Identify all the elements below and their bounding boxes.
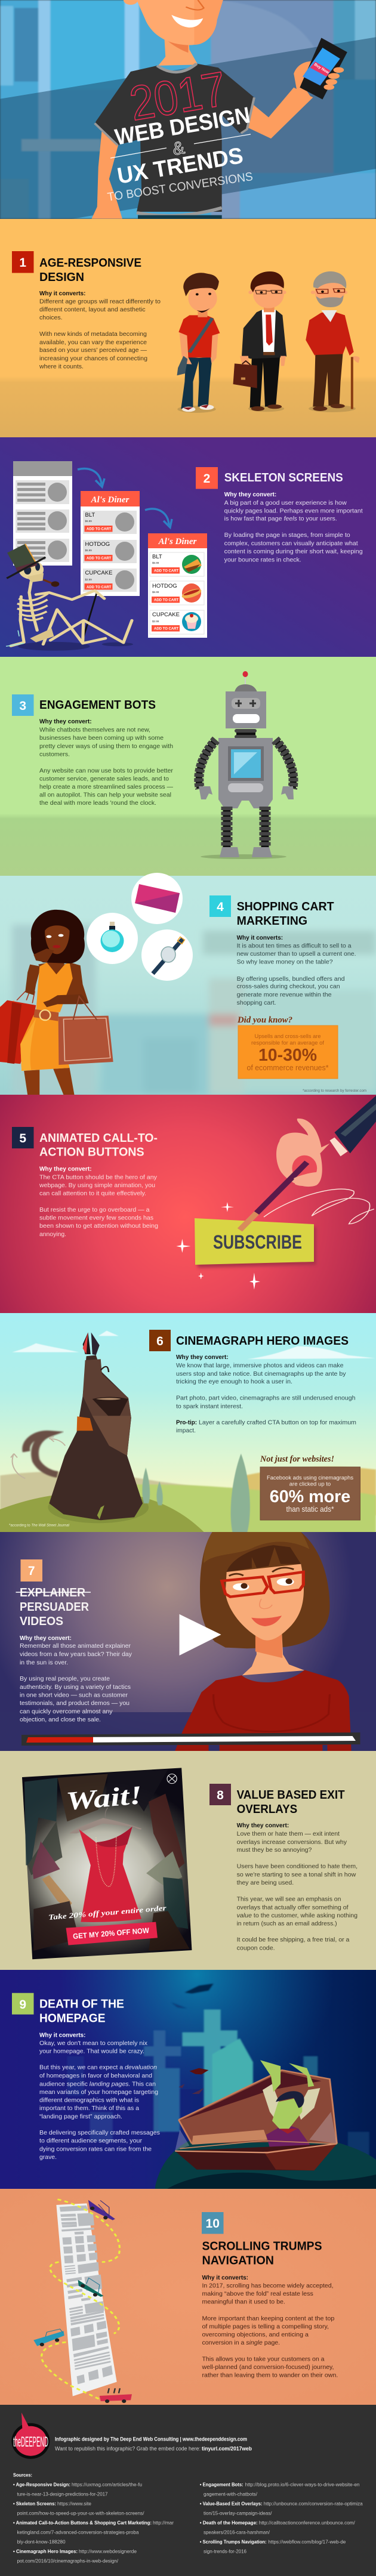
number badge 9 xyxy=(12,1993,33,2015)
body text: Why they convert: xyxy=(20,1635,72,1642)
sources: right column: gagement-with-chatbots/ xyxy=(204,2491,258,2497)
sources: right column: tion/15-overlay-campaign-ideas/ xyxy=(204,2510,272,2516)
panel: 6 cinemagraph hero images xyxy=(0,1313,376,1533)
body text: videos from a few years back? Their day xyxy=(20,1651,132,1658)
sources: right column: speakers/2016-cara-harshman/ xyxy=(204,2529,270,2535)
body text: to spark instant interest. xyxy=(176,1404,243,1410)
panel: 4 shopping cart marketing xyxy=(0,873,376,1095)
wireframe card 3: fully loaded: Al's Diner xyxy=(158,537,197,546)
heading xyxy=(39,1998,124,2025)
body text: shopping cart. xyxy=(237,1000,276,1006)
body text: meaningful than it used to be. xyxy=(202,2299,285,2306)
footnote: *according to research by forrester.com xyxy=(303,1089,366,1093)
heading: DEATH OF THE xyxy=(39,1998,124,2011)
body text: Users have been conditioned to hate them, xyxy=(237,1864,357,1870)
body text: well-planned (and conversion-focused) journey, xyxy=(201,2364,334,2371)
body text: Why they convert: xyxy=(39,719,92,725)
credit lines: Want to republish this infographic? Grab the embed code here: xyxy=(55,2445,201,2451)
body text: overcoming objections, and enticing a xyxy=(202,2331,309,2338)
body text: overlays increase conversions. But why xyxy=(237,1839,347,1846)
title xyxy=(107,62,254,204)
callout: not just for websites: 60% more xyxy=(270,1487,350,1506)
body text: By offering upsells, bundled offers and xyxy=(237,976,345,983)
wireframe card 3: fully loaded: ADD TO CART xyxy=(154,599,179,603)
body text: dying conversion rates can rise from the xyxy=(39,2146,152,2152)
wireframe card 2: partly loaded: Al's Diner xyxy=(91,495,130,505)
body text xyxy=(20,1635,132,1723)
wireframe card 3: fully loaded: ADD TO CART xyxy=(154,569,179,573)
callout: not just for websites: Not just for websites! xyxy=(260,1454,334,1464)
wireframe card 3: fully loaded xyxy=(148,533,207,638)
wireframe card 2: partly loaded xyxy=(81,491,140,596)
heading: NAVIGATION xyxy=(202,2254,274,2268)
body text: “landing page first” approach. xyxy=(39,2114,122,2120)
heading: MARKETING xyxy=(237,915,307,928)
body text: annoying. xyxy=(39,1231,66,1238)
body text: all on autopilot. This can help your website seal xyxy=(39,792,171,799)
wireframe card 3: fully loaded: $2.99 xyxy=(152,620,159,623)
heading: DESIGN xyxy=(39,271,84,284)
blurred background figure at desk xyxy=(290,745,366,826)
body text: testimonials, and product demos — you xyxy=(20,1700,130,1707)
body text: in return (such as an email address.) xyxy=(237,1920,337,1927)
body text: Be delivering specifically crafted messages xyxy=(39,2130,160,2136)
title: UX TRENDS xyxy=(115,143,245,189)
body text: mean variants of your homepage targeting xyxy=(39,2089,158,2096)
callout: not just for websites: than static ads* xyxy=(286,1505,334,1514)
body text: subtle movement every few seconds has xyxy=(39,1215,153,1222)
body text: customers. xyxy=(39,752,70,758)
number badge 10: 10 xyxy=(206,2217,220,2231)
icon: video play button xyxy=(179,1614,221,1655)
number badge 4 xyxy=(209,895,231,917)
section 3 background xyxy=(0,657,376,876)
number badge 6 xyxy=(149,1330,171,1351)
wireframe card 1: skeleton xyxy=(13,461,72,566)
body text: your homepage. That would be crazy. xyxy=(39,2048,144,2055)
body text: generate more revenue within the xyxy=(237,992,332,998)
sources: left column: point.com/how-to-speed-up-your-ux-with-skeleton-screens/ xyxy=(17,2510,144,2516)
body text: A big part of a good user experience is how xyxy=(224,500,347,506)
number badge 10 xyxy=(202,2212,223,2234)
title: WEB DESIGN xyxy=(113,103,252,150)
number badge 3: 3 xyxy=(19,699,26,713)
sources: left column: • Age-Responsive Design: xyxy=(13,2482,70,2487)
callout: not just for websites: Facebook ads using cinemagraphs xyxy=(267,1475,353,1481)
panel: 10 scrolling trumps navigation xyxy=(0,2189,376,2405)
wireframe card 2: partly loaded: ADD TO CART xyxy=(87,527,112,531)
wireframe card 3: fully loaded: $6.99 xyxy=(152,591,159,594)
wireframe card 3: fully loaded: HOTDOG xyxy=(152,583,177,589)
body text: By using real people, you create xyxy=(20,1676,110,1682)
heading: SCROLLING TRUMPS xyxy=(202,2240,322,2253)
heading: SKELETON SCREENS xyxy=(224,471,343,484)
wireframe card 2: partly loaded: ADD TO CART xyxy=(87,557,112,561)
body text: users stop and take notice. But cinemagraphs up the ante by xyxy=(176,1371,346,1377)
number badge 7 xyxy=(20,1559,42,1582)
section 5 background xyxy=(0,1095,376,1313)
body text: tricking the eye enough to hook a user in. xyxy=(176,1379,292,1385)
body text: coupon code. xyxy=(237,1945,275,1951)
number badge 1 xyxy=(12,251,33,273)
panel: 2 skeleton screens xyxy=(0,437,376,657)
body text: to different audience segments, your xyxy=(39,2138,143,2145)
callout: not just for websites: are clicked up to xyxy=(289,1481,331,1488)
character: robot xyxy=(199,671,294,859)
exit overlay popup illustration xyxy=(22,1768,192,1959)
character: woman with shopping bags xyxy=(0,910,113,1095)
body text: choices. xyxy=(39,315,63,322)
panel: 8 value based exit overlays xyxy=(0,1751,376,1970)
heading: VALUE BASED EXIT xyxy=(237,1789,345,1802)
subscribe button: SUBSCRIBE xyxy=(213,1231,302,1253)
body text xyxy=(237,1823,357,1951)
sources: left column: http://mar xyxy=(153,2520,174,2525)
heading: AGE-RESPONSIVE xyxy=(39,257,141,270)
footer background xyxy=(0,2405,376,2576)
credit lines: Infographic designed by The Deep End Web Consulting | www.thedeependdesign.com xyxy=(55,2436,247,2442)
body text: Love them or hate them — exit intent xyxy=(237,1831,340,1837)
panel: 5 animated call-to-action buttons xyxy=(0,1095,376,1313)
video progress bar xyxy=(21,1732,360,1746)
body text: impact. xyxy=(176,1428,196,1434)
body text: conversion in a single page. xyxy=(202,2340,280,2346)
sources: left column: ketingland.com/7-advanced-conversion-strategies-proba xyxy=(17,2529,139,2535)
number badge 9: 9 xyxy=(19,1998,26,2012)
heading with strikethrough: PERSUADER xyxy=(20,1601,90,1614)
body text: been shown to get attention without being xyxy=(39,1223,158,1230)
sources: right column: • Engagement Bots: xyxy=(200,2482,244,2487)
heading with strikethrough: EXPLAINER xyxy=(20,1586,86,1599)
sources: left column: http://www.webdesignerde xyxy=(79,2549,137,2554)
heading xyxy=(202,2240,322,2268)
sources: left column: • Animated Call-to-Action Buttons & Shopping Cart Marketing: xyxy=(13,2520,152,2525)
sources: right column: • Death of the Homepage: xyxy=(200,2520,258,2525)
logo: the deep end xyxy=(11,2413,50,2459)
heading xyxy=(39,1132,158,1159)
number badge 3 xyxy=(12,694,33,716)
body text xyxy=(224,492,363,563)
sources: left column: ture-is-near-13-design-predictions-for-2017 xyxy=(17,2491,108,2497)
character: man with phone xyxy=(91,0,347,219)
wireframe card 3: fully loaded: CUPCAKE xyxy=(152,611,180,618)
sources: left column: https://uxmag.com/articles/the-fu xyxy=(72,2482,142,2487)
body text: Why it converts: xyxy=(39,291,86,297)
callout: did you know xyxy=(237,1015,338,1079)
wireframe card 2: partly loaded: $2.99 xyxy=(85,578,92,581)
body text: Why they convert: xyxy=(237,1823,289,1829)
body text: can call attention to it quite effectively. xyxy=(39,1190,146,1197)
hero blurred city background xyxy=(0,0,376,219)
body text: grave. xyxy=(39,2154,57,2161)
body text: With new kinds of metadata becoming xyxy=(39,331,147,338)
callout: did you know: Upsells and cross-sells are xyxy=(254,1033,321,1040)
heading: ANIMATED CALL-TO- xyxy=(39,1132,158,1145)
body text: is how fast that page feels to your users. xyxy=(224,516,337,523)
section 1 background xyxy=(0,219,376,437)
popup text: Wait! xyxy=(65,1780,143,1816)
shopping bubble: wallet xyxy=(131,873,183,924)
sources: right column: sign-trends-for-2016 xyxy=(204,2549,246,2554)
section 8 background xyxy=(0,1751,376,1970)
body text: But resist the urge to go overboard — a xyxy=(39,1207,150,1213)
wireframe card 3: fully loaded: ADD TO CART xyxy=(154,628,179,631)
heading: CINEMAGRAPH HERO IMAGES xyxy=(176,1335,349,1348)
body text: customer service, generate sales leads, and to xyxy=(39,776,169,783)
body text: must they be so annoying? xyxy=(237,1847,312,1854)
body text xyxy=(201,2275,338,2379)
panel: footer xyxy=(0,2405,376,2576)
body text: value to the customer, while asking nothing xyxy=(237,1913,357,1919)
body text: webpage. By using simple animation, you xyxy=(39,1182,155,1189)
body text: help create a more streamlined sales process — xyxy=(39,784,174,790)
body text: cross-sales during checkout, you can xyxy=(237,984,340,990)
section 2 background xyxy=(0,437,376,657)
body text: This allows you to take your customers on a xyxy=(202,2356,325,2363)
body text: pretty clever ways of using them to engage with xyxy=(39,743,173,750)
number badge 5 xyxy=(12,1127,33,1148)
sources: right column: http://blog.proto.io/6-clever-ways-to-drive-website-en xyxy=(245,2482,360,2487)
body text: businesses have been coming up with some xyxy=(39,735,164,742)
sources heading: Sources: xyxy=(13,2472,32,2478)
number badge 6: 6 xyxy=(156,1335,164,1348)
body text: It could be free shipping, a free trial, or a xyxy=(237,1937,350,1944)
body text xyxy=(176,1354,356,1434)
wireframe card 3: fully loaded: $6.99 xyxy=(152,561,159,564)
body text: The CTA button should be the hero of any xyxy=(39,1174,158,1181)
callout: did you know: 10-30% xyxy=(258,1046,317,1065)
number badge 1: 1 xyxy=(19,256,26,270)
body text: in the sun is over. xyxy=(20,1660,68,1666)
body text xyxy=(39,719,174,807)
section 9 background: graveyard xyxy=(0,1970,376,2189)
popup text: Take 20% off your entire order xyxy=(48,1904,167,1922)
sources: left column: • Skeleton Screens: xyxy=(13,2501,56,2506)
callout: did you know: Did you know? xyxy=(237,1015,292,1025)
body text: content is coming during their short wait, keeping xyxy=(224,549,363,555)
body text: By loading the page in stages, from simple to xyxy=(224,532,350,539)
body text: important to them. Think of this as a xyxy=(39,2105,139,2112)
heading xyxy=(237,900,334,928)
callout: not just for websites xyxy=(260,1454,360,1520)
body text: Part photo, part video, cinemagraphs are still underused enough xyxy=(176,1395,356,1402)
body text: But this year, we can expect a devaluation xyxy=(39,2065,157,2071)
body text: overlays that actually offer something of xyxy=(237,1904,349,1911)
sources: left column: • Cinemagraph Hero Images: xyxy=(13,2549,78,2554)
number badge 2: 2 xyxy=(204,472,210,486)
body text: While chatbots themselves are not new, xyxy=(39,727,150,734)
body text: complex, customers can visually anticipate what xyxy=(224,540,358,547)
body text: of multiple pages is telling a compelling story, xyxy=(202,2324,329,2330)
body text: in one short video — such as customer xyxy=(20,1692,128,1699)
body text: Why they convert: xyxy=(224,492,276,498)
body text: This year, we will see an emphasis on xyxy=(237,1896,341,1902)
body text: available, you can vary the experience xyxy=(39,339,147,346)
phone label: buy now: Buy Now xyxy=(313,63,330,75)
body text: different demographics with what is xyxy=(39,2097,139,2104)
body text: Why it converts: xyxy=(39,2032,86,2038)
body text: It is about ten times as difficult to sell to a xyxy=(237,943,352,949)
body text xyxy=(237,935,356,1006)
section 7 background xyxy=(0,1532,376,1751)
arrow from card 2 to card 3 xyxy=(145,509,172,527)
panel: hero header xyxy=(0,0,376,219)
number badge 5: 5 xyxy=(19,1132,26,1145)
body text: We know that large, immersive photos and videos can make xyxy=(176,1363,344,1369)
shopping bubble: perfume xyxy=(87,913,138,964)
body text: can quickly overcome almost any xyxy=(20,1709,113,1715)
wireframe card 2: partly loaded: BLT xyxy=(85,512,95,518)
body text: So why leave money on the table? xyxy=(237,959,333,965)
wireframe card 2: partly loaded: CUPCAKE xyxy=(85,570,112,576)
body text: Any website can now use bots to provide better xyxy=(39,768,174,774)
sources: right column: http://unbounce.com/conversion-rate-optimiza xyxy=(264,2501,363,2506)
sources: right column: • Scrolling Trumps Navigation: xyxy=(200,2539,267,2544)
title: & xyxy=(171,138,186,159)
wireframe card 3: fully loaded: BLT xyxy=(152,554,162,560)
title: 2017 xyxy=(126,62,230,131)
diagonal dark band xyxy=(0,37,376,219)
wireframe card 2: partly loaded: HOTDOG xyxy=(85,541,110,548)
callout: did you know: responsible for an average of xyxy=(251,1040,324,1046)
popup text xyxy=(48,1780,167,1941)
body text xyxy=(39,291,161,370)
body text xyxy=(39,1166,158,1238)
credit lines xyxy=(55,2436,252,2451)
body text: Why they convert: xyxy=(39,1166,92,1173)
body text: rather than leaving them to wander on their own. xyxy=(202,2373,338,2379)
heading: SHOPPING CART xyxy=(237,900,334,913)
section 6 background: sky, clouds and hills xyxy=(0,1313,376,1533)
wireframe card 2: partly loaded: $6.99 xyxy=(85,549,92,552)
body text: objection, and close the sale. xyxy=(20,1717,101,1723)
shopping bubble: watch xyxy=(141,929,193,981)
body text: In 2017, scrolling has become widely accepted, xyxy=(202,2283,333,2290)
body text: based on your users' perceived age — xyxy=(39,347,147,354)
sources: left column: bly-dont-know-188280 xyxy=(17,2539,66,2544)
wireframe card 2: partly loaded: $6.99 xyxy=(85,520,92,523)
body text: Layer a carefully crafted CTA button on top for maximum xyxy=(199,1420,356,1426)
number badge 4: 4 xyxy=(217,900,224,914)
characters: young, middle-aged and older man xyxy=(177,271,360,413)
heading: HOMEPAGE xyxy=(39,2012,105,2025)
sources: right column: https://webflow.com/blog/17-web-de xyxy=(268,2539,346,2544)
illustration: vampire rising from coffin with bats xyxy=(175,2060,337,2170)
heading xyxy=(39,257,141,284)
heading: ENGAGEMENT BOTS xyxy=(39,699,156,712)
title: TO BOOST CONVERSIONS xyxy=(107,170,254,204)
body text: of homepages in favor of behavioral and xyxy=(39,2073,152,2080)
body text: Okay, we don't mean to completely nix xyxy=(39,2040,147,2047)
number badge 7: 7 xyxy=(28,1564,35,1578)
body text: quickly pages load. Perhaps even more important xyxy=(224,508,363,514)
body text: new customer than to upsell a current one. xyxy=(237,951,356,957)
credit lines: tinyurl.com/2017web xyxy=(202,2445,252,2451)
section 10 background xyxy=(0,2189,376,2405)
subscribe button xyxy=(195,1218,316,1268)
body text: authenticity. By using a variety of tactics xyxy=(20,1684,131,1691)
body text: making “above the fold” real estate less xyxy=(202,2291,313,2297)
callout: did you know: of ecommerce revenues* xyxy=(247,1064,329,1072)
body text: Why it converts: xyxy=(202,2275,248,2281)
sources: left column xyxy=(13,2482,174,2563)
panel: 9 death of the homepage xyxy=(0,1970,376,2189)
panel: 7 persuader videos xyxy=(0,1532,376,1751)
section 4 background with blurred storefronts xyxy=(0,876,376,1095)
body text: your bounce rates in check. xyxy=(224,557,301,563)
body text: More important than keeping content at the top xyxy=(202,2315,335,2322)
body text: Different age groups will react differently to xyxy=(39,299,161,305)
body text: Why they convert: xyxy=(176,1354,229,1361)
body text: Why it converts: xyxy=(237,935,283,941)
popup text: GET MY 20% OFF NOW xyxy=(73,1926,150,1941)
number badge 2 xyxy=(196,467,218,489)
number badge 8 xyxy=(209,1784,231,1805)
sources: right column: • Value-Based Exit Overlays: xyxy=(200,2501,263,2506)
number badge 8: 8 xyxy=(217,1789,224,1802)
body text: audience specific landing pages. This can xyxy=(39,2081,156,2087)
heading: ACTION BUTTONS xyxy=(39,1146,144,1159)
heading: OVERLAYS xyxy=(237,1803,297,1816)
arrow from card 1 to card 2 xyxy=(78,469,104,487)
body text: Pro-tip: xyxy=(176,1420,197,1426)
illustration: hand holding wand with swirls and sparkles xyxy=(176,1096,376,1290)
body text: different content, layout and aesthetic xyxy=(39,307,146,313)
footnote: *according to The Wall Street Journal xyxy=(9,1524,70,1528)
panel: 3 engagement bots xyxy=(0,657,376,876)
body text: where it counts. xyxy=(39,364,84,370)
wireframe card 2: partly loaded: ADD TO CART xyxy=(87,586,112,589)
body text: the deal with more leads 'round the clock. xyxy=(39,800,156,807)
panel: footer: theDEEPEND xyxy=(13,2434,48,2450)
character: skeleton with top hat and cane xyxy=(6,544,133,651)
sources: left column: https://www.site xyxy=(57,2501,91,2506)
heading xyxy=(237,1789,345,1816)
body text: increasing your chances of connecting xyxy=(39,356,147,362)
body text xyxy=(39,2032,160,2161)
sources: left column: pot.com/2016/10/cinemagraphs-in-web-design/ xyxy=(17,2558,119,2563)
heading with strikethrough xyxy=(16,1586,91,1628)
panel: 1 age-responsive design xyxy=(0,219,376,437)
body text: Remember all those animated explainer xyxy=(20,1643,131,1650)
body text: so we're starting to see a tonal shift in how xyxy=(237,1872,356,1879)
illustration: scrolling page with cars xyxy=(33,2200,132,2403)
sources: right column: http://calltoactionconference.unbounce.com/ xyxy=(259,2520,356,2525)
sources: right column xyxy=(200,2482,363,2554)
character: woman with glasses xyxy=(175,1532,352,1751)
character: llama xyxy=(11,1332,143,1520)
body text: they are being used. xyxy=(237,1880,294,1886)
heading with strikethrough: VIDEOS xyxy=(20,1615,63,1628)
